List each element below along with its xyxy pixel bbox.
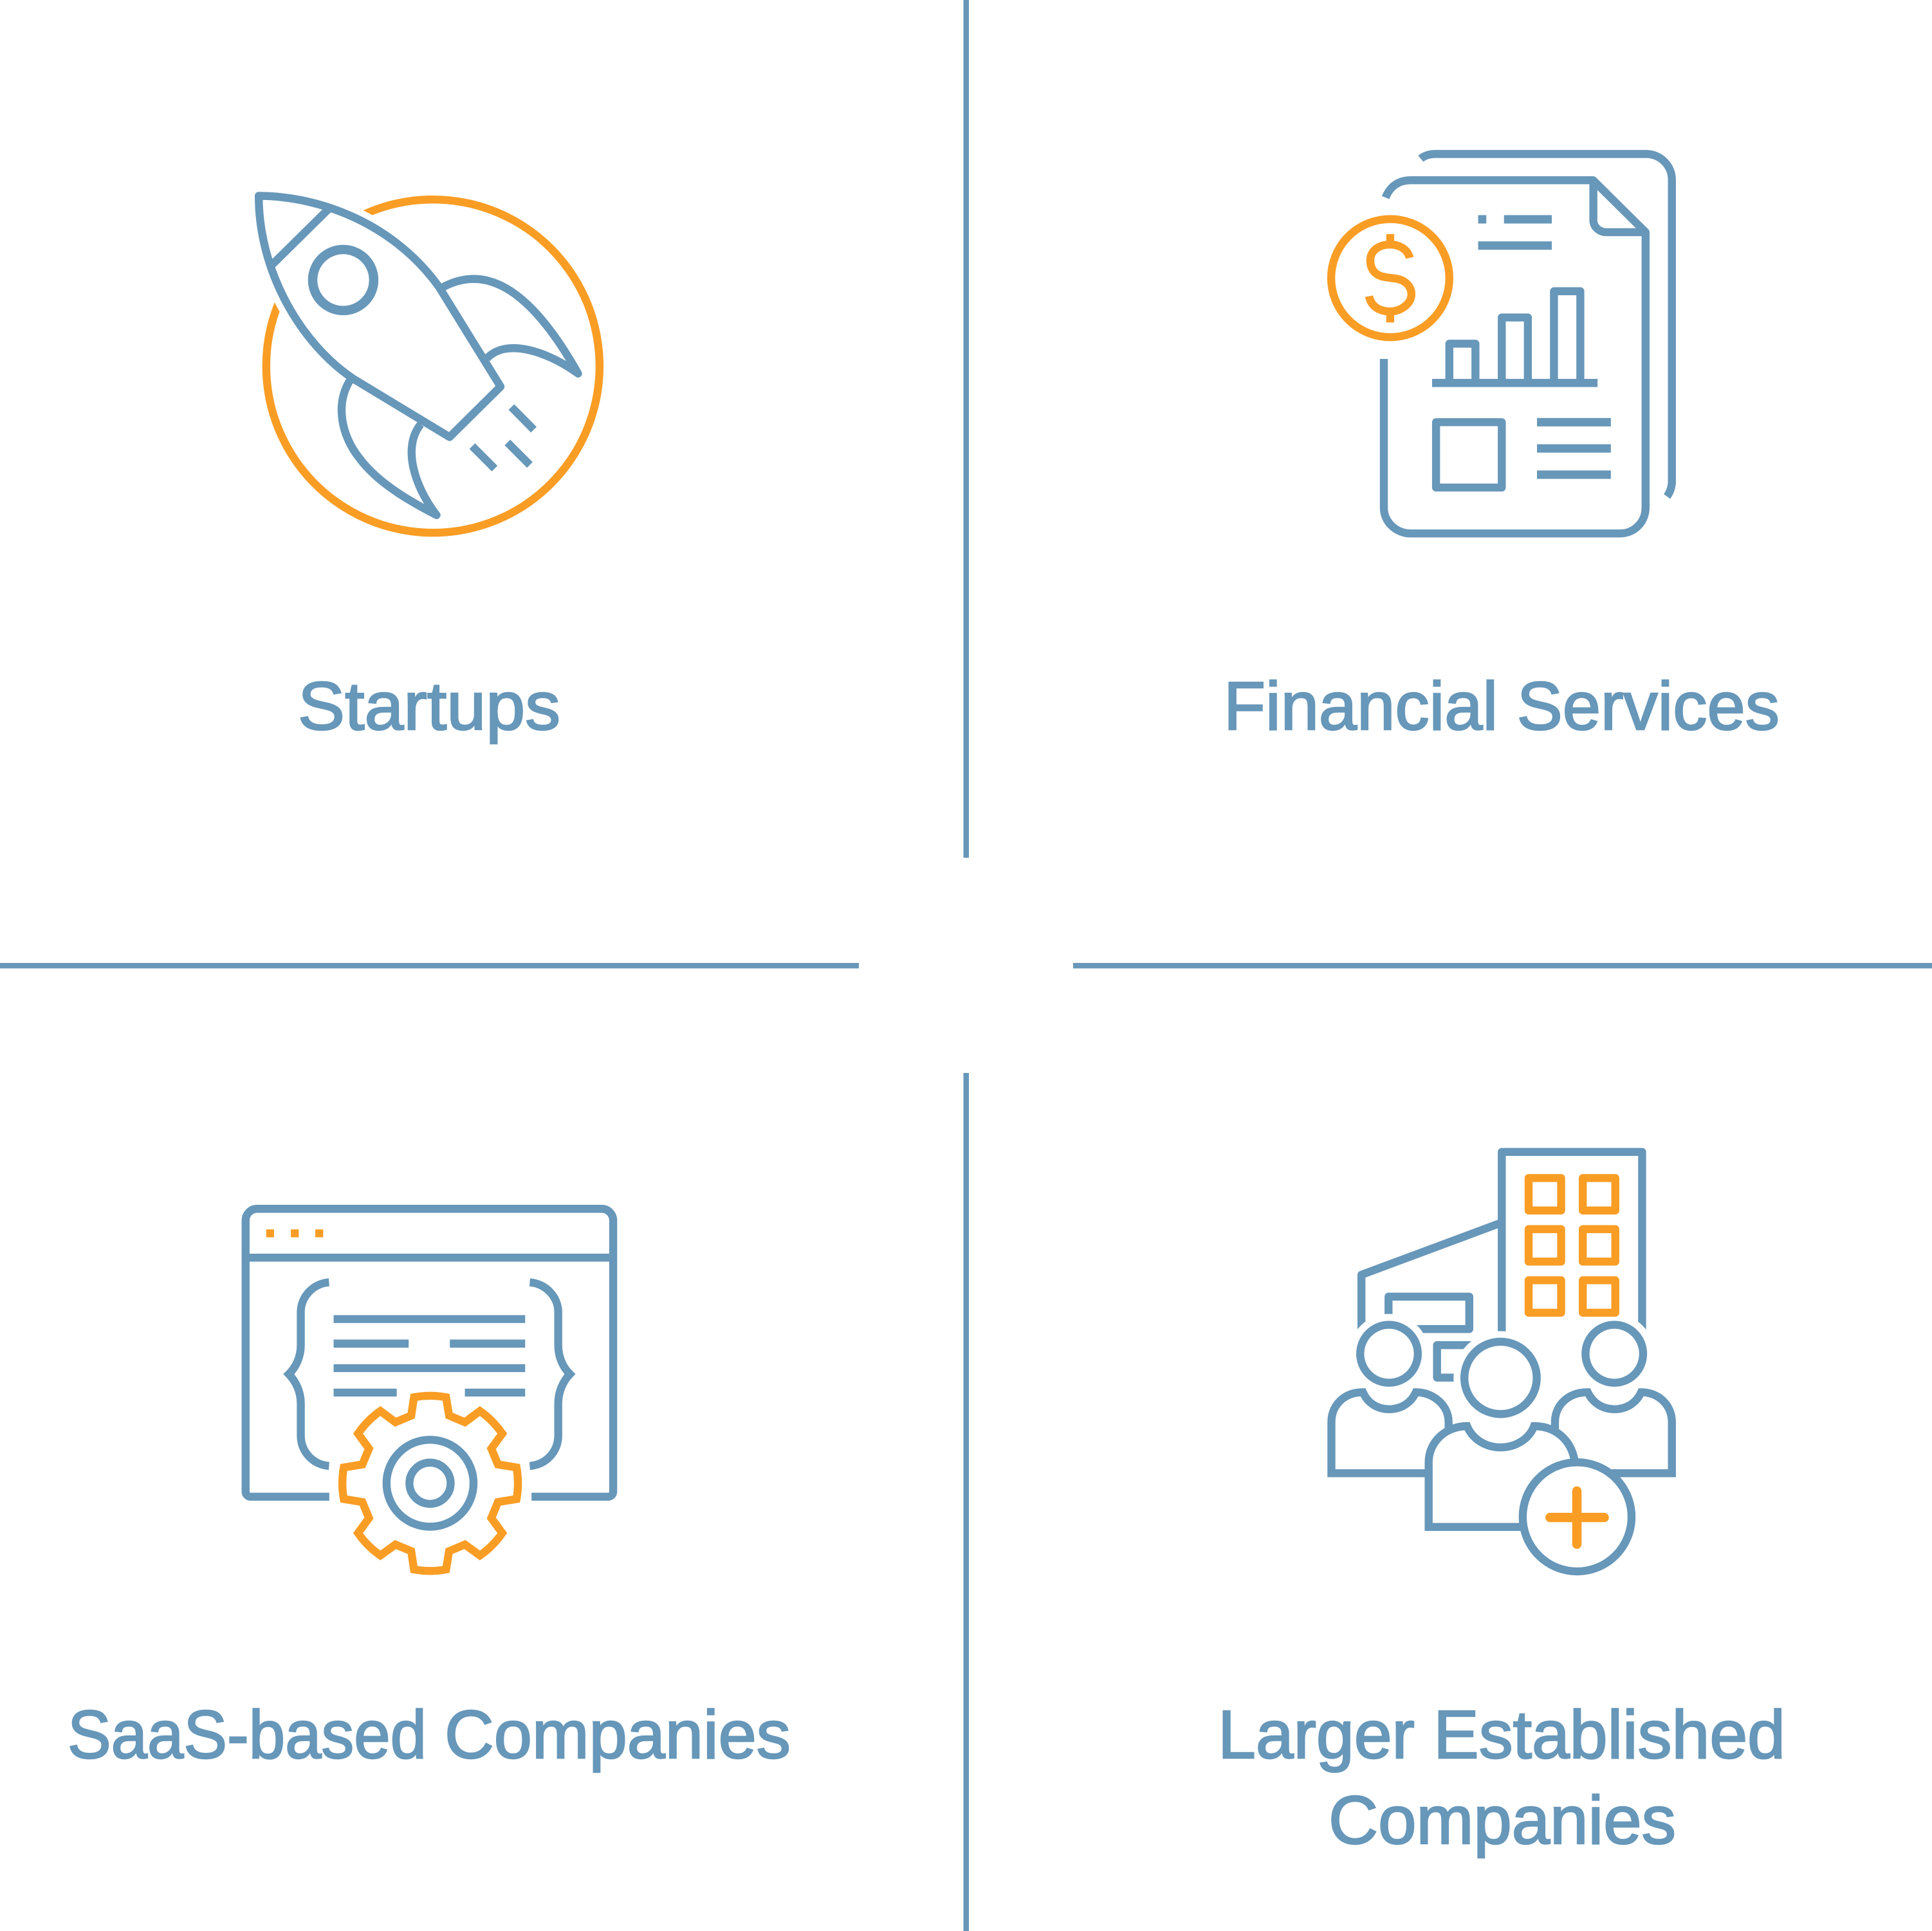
image block and text lines bbox=[1436, 418, 1611, 488]
header lines bbox=[1478, 215, 1552, 250]
panel: larger established companies bbox=[1218, 1152, 1785, 1858]
label: larger established companies bbox=[1218, 1697, 1785, 1858]
building windows bbox=[1529, 1178, 1615, 1313]
document sheets bbox=[1384, 154, 1672, 533]
rocket bbox=[259, 196, 578, 515]
browser window bbox=[246, 1209, 613, 1497]
building bbox=[1361, 1152, 1642, 1378]
icon: dollar coin bbox=[1331, 219, 1449, 337]
icon: gear bbox=[342, 1396, 518, 1571]
panel: startups bbox=[259, 196, 600, 744]
code lines bbox=[334, 1315, 525, 1396]
white gaps around heads bbox=[1349, 1314, 1654, 1425]
label: saas companies bbox=[68, 1697, 791, 1773]
label: saas companies: Companies bbox=[445, 1697, 791, 1773]
label: larger established companies: Larger Established bbox=[1218, 1697, 1785, 1773]
label: startups: Startups bbox=[298, 668, 560, 744]
panel: saas companies bbox=[68, 1209, 791, 1773]
bar chart bbox=[1432, 291, 1597, 387]
plus badge bbox=[1523, 1462, 1632, 1571]
icon: building with people bbox=[1331, 1152, 1672, 1571]
people bbox=[1331, 1325, 1672, 1527]
icon: browser window with gear bbox=[246, 1209, 613, 1571]
label: larger established companies: Companies bbox=[1329, 1782, 1676, 1858]
icon: financial document bbox=[1331, 154, 1672, 533]
orange circle arc bbox=[266, 199, 600, 533]
label: financial services: Financial Services bbox=[1224, 668, 1780, 744]
window dots bbox=[266, 1229, 323, 1238]
curly braces bbox=[289, 1283, 570, 1466]
label: saas companies: SaaS-based bbox=[68, 1697, 427, 1773]
panel: financial services bbox=[1224, 154, 1780, 744]
icon: rocket in circle bbox=[259, 196, 600, 533]
